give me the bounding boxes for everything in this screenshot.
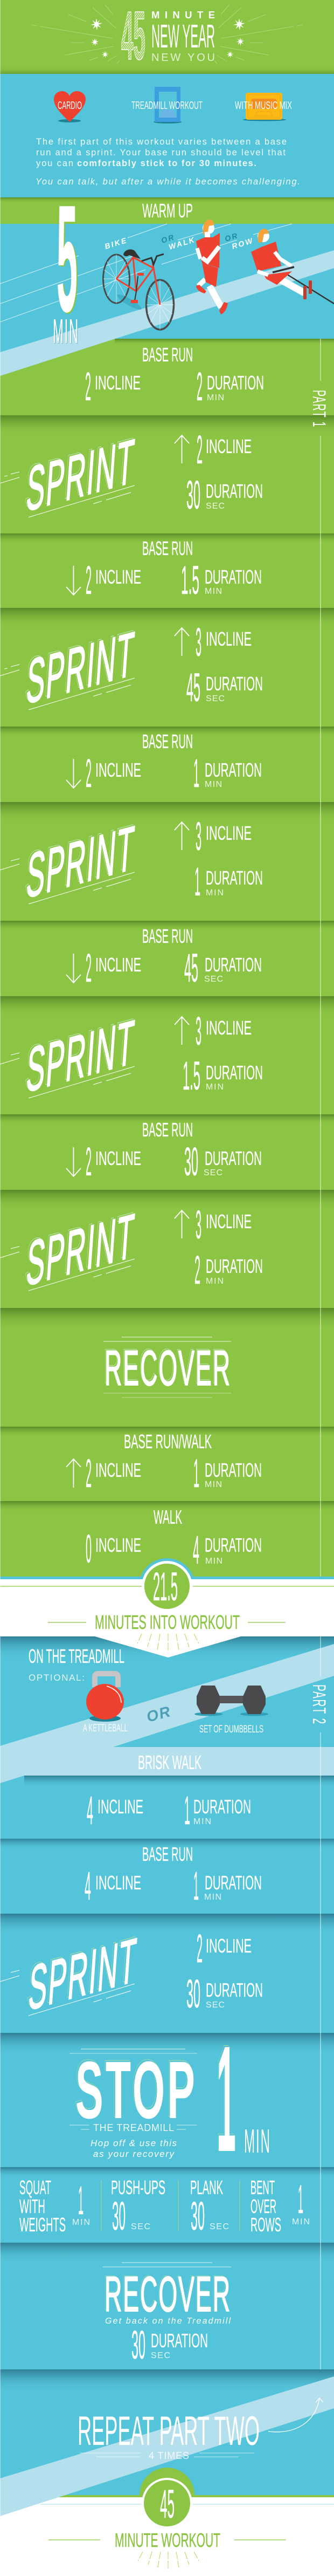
duration: 2 bbox=[197, 364, 203, 409]
icon: sparkle stars bbox=[91, 18, 245, 58]
label: bike: BIKE bbox=[103, 236, 128, 251]
exercise: push-ups: PUSH-UPS bbox=[111, 2176, 165, 2198]
icon: heart cardio: CARDIO bbox=[58, 99, 82, 112]
panel: warm up bbox=[0, 173, 334, 376]
duration: SEC bbox=[204, 1168, 222, 1177]
subheading: the treadmill bbox=[69, 2122, 197, 2133]
timeline: part 1 label and rule: PART 1 bbox=[309, 390, 329, 428]
incline: 0 bbox=[86, 1526, 92, 1571]
incline: INCLINE bbox=[95, 759, 141, 781]
light band bbox=[0, 250, 334, 376]
duration: DURATION bbox=[205, 954, 262, 976]
big number 1 min: 1 bbox=[215, 2013, 235, 2182]
incline: INCLINE bbox=[95, 1872, 141, 1894]
heading: sprint bbox=[0, 811, 137, 912]
panel: blue part two background bbox=[0, 1636, 334, 2495]
incline: 2 bbox=[86, 751, 92, 796]
panel: sprint 1 bbox=[0, 415, 334, 525]
incline bbox=[196, 1009, 252, 1053]
duration: 1 bbox=[193, 751, 199, 796]
decorative rays bbox=[137, 1634, 199, 1650]
top rules bbox=[81, 2049, 185, 2050]
intro paragraph: The first part of this workout varies between a base bbox=[36, 137, 287, 147]
incline bbox=[86, 751, 141, 796]
heading: sprint bbox=[0, 1199, 137, 1300]
circle badge 21.5 bbox=[144, 1564, 190, 1609]
incline bbox=[86, 1526, 141, 1571]
incline bbox=[197, 1926, 252, 1971]
label: set of dumbbells: SET OF DUMBBELLS bbox=[199, 1724, 263, 1735]
duration: MIN bbox=[205, 780, 222, 789]
panel: optional equipment bbox=[29, 1645, 268, 1735]
duration bbox=[186, 665, 263, 710]
title words NEW YOU: NEW YOU bbox=[151, 52, 215, 64]
exercise: bent over rows: 1 bbox=[298, 2177, 303, 2222]
figure: runner bbox=[196, 220, 228, 314]
panel: sprint 2: SPRINT bbox=[24, 619, 137, 718]
incline: INCLINE bbox=[206, 822, 252, 844]
intro paragraph: You can talk, but after a while it becomes challenging. bbox=[36, 177, 300, 187]
arrow: repeat bbox=[268, 2398, 323, 2432]
track road bbox=[0, 224, 334, 376]
incline: 4 bbox=[87, 1788, 93, 1833]
arrow down bbox=[66, 954, 81, 983]
incline: INCLINE bbox=[206, 1210, 252, 1232]
diagonal band bbox=[0, 2376, 334, 2516]
panel: warm up: 5 bbox=[58, 174, 79, 345]
duration: 30 bbox=[131, 2322, 145, 2367]
note: hop off bbox=[91, 2138, 177, 2159]
big number 1 min: 1 bbox=[217, 2015, 236, 2183]
panel: sprint 3 bbox=[0, 802, 334, 912]
arrow down bbox=[66, 759, 81, 788]
incline: INCLINE bbox=[95, 1534, 141, 1556]
panel: base run walk bbox=[0, 1427, 334, 1496]
incline bbox=[196, 620, 252, 664]
decorative rays bbox=[138, 2552, 199, 2568]
recover top rules bbox=[103, 1337, 231, 1341]
duration bbox=[193, 751, 262, 796]
intro paragraph bbox=[36, 137, 300, 187]
icon: dumbbell bbox=[194, 1686, 268, 1716]
panel: base run 3 bbox=[0, 727, 334, 796]
duration: DURATION bbox=[206, 1979, 263, 2001]
heading: sprint bbox=[0, 1005, 137, 1106]
exercise: squat with weights: WEIGHTS bbox=[19, 2214, 66, 2236]
incline: INCLINE bbox=[95, 1459, 141, 1481]
duration bbox=[184, 1139, 262, 1184]
heading: stop: STOP bbox=[75, 2044, 197, 2135]
exercise: bent over rows: OVER bbox=[250, 2195, 276, 2217]
heading: stop bbox=[74, 2043, 197, 2135]
icon: heart cardio bbox=[54, 91, 86, 122]
duration bbox=[186, 472, 263, 517]
heading: recover bbox=[103, 2266, 231, 2322]
duration: DURATION bbox=[205, 1147, 262, 1169]
panel: base run 2 bbox=[0, 533, 334, 602]
duration: MIN bbox=[207, 393, 224, 402]
panel: sprint 1: SPRINT bbox=[23, 424, 136, 524]
duration bbox=[183, 1053, 263, 1098]
duration: DURATION bbox=[205, 566, 262, 588]
exercise: squat with weights: WITH bbox=[19, 2195, 45, 2217]
panel: warm up: MIN bbox=[53, 312, 80, 351]
circle badge 45 bbox=[144, 2480, 190, 2526]
duration bbox=[194, 859, 263, 904]
exercise: squat with weights: MIN bbox=[72, 2218, 90, 2227]
top rules bbox=[103, 2263, 231, 2267]
heading: BRISK WALK bbox=[138, 1751, 201, 1773]
incline: 2 bbox=[86, 1139, 92, 1184]
label: row: ROW bbox=[231, 236, 255, 251]
incline: 3 bbox=[196, 1009, 201, 1053]
incline: 2 bbox=[86, 946, 92, 990]
incline: 2 bbox=[86, 1451, 92, 1496]
duration: 45 bbox=[184, 946, 198, 990]
heading: on the treadmill: ON THE TREADMILL bbox=[29, 1645, 124, 1667]
heading: BASE RUN bbox=[142, 925, 193, 947]
incline: INCLINE bbox=[95, 1147, 141, 1169]
intro paragraph: you can bbox=[36, 159, 73, 168]
duration: MIN bbox=[193, 1817, 211, 1826]
second rule bbox=[69, 2053, 197, 2054]
label: optional: OPTIONAL: bbox=[29, 1673, 85, 1683]
duration: 30 bbox=[186, 1971, 200, 2016]
duration bbox=[193, 1864, 262, 1908]
incline bbox=[86, 1139, 141, 1184]
arrow down bbox=[66, 1147, 81, 1176]
panel: 21.5 minutes divider: 21.5 bbox=[153, 1564, 178, 1609]
icon: bicycle bbox=[103, 249, 173, 330]
panel: stop the treadmill: MIN bbox=[244, 2123, 271, 2160]
incline: 2 bbox=[197, 427, 203, 472]
exercise: push-ups bbox=[111, 2176, 165, 2238]
duration: 1.5 bbox=[183, 1053, 200, 1098]
duration: 1 bbox=[184, 1788, 190, 1833]
panel: title header: NEW YEAR bbox=[151, 18, 215, 54]
note: get back on: Get back on the Treadmill bbox=[105, 2317, 231, 2326]
duration: MIN bbox=[206, 1277, 224, 1286]
figure: rower bbox=[251, 229, 334, 304]
white footer ground bbox=[0, 2497, 334, 2576]
incline: 2 bbox=[197, 1926, 203, 1971]
exercise: plank bbox=[190, 2176, 229, 2238]
arrow down bbox=[66, 566, 81, 595]
arrow up bbox=[175, 822, 189, 850]
panel: sprint part two: SPRINT bbox=[25, 1923, 138, 2023]
duration: DURATION bbox=[205, 1534, 262, 1556]
incline: 2 bbox=[86, 558, 92, 602]
label: or: OR bbox=[224, 231, 240, 243]
note: hop off: as your recovery bbox=[93, 2149, 175, 2159]
heading: BASE RUN bbox=[142, 344, 193, 366]
duration bbox=[197, 364, 264, 409]
intro paragraph: comfortably stick to for 30 minutes. bbox=[77, 159, 256, 168]
heading: recover bbox=[103, 1339, 231, 1396]
heading: BASE RUN/WALK bbox=[124, 1430, 212, 1453]
heading: BASE RUN bbox=[142, 537, 193, 559]
incline: 3 bbox=[196, 620, 201, 664]
arrow up bbox=[175, 435, 189, 463]
heading: BASE RUN bbox=[142, 730, 193, 752]
duration: DURATION bbox=[151, 2330, 208, 2352]
duration: MIN bbox=[204, 1893, 221, 1902]
exercise: push-ups: SEC bbox=[131, 2222, 150, 2231]
duration: 1 bbox=[194, 859, 200, 904]
duration: 30 bbox=[184, 1139, 198, 1184]
panel: sprint 4: SPRINT bbox=[23, 1005, 136, 1105]
incline bbox=[196, 814, 252, 859]
duration: SEC bbox=[206, 502, 225, 511]
incline: INCLINE bbox=[206, 1017, 252, 1039]
exercise: push-ups: 30 bbox=[112, 2194, 126, 2238]
panel: walk bbox=[0, 1501, 334, 1572]
duration: 1.5 bbox=[181, 558, 199, 602]
heading: sprint bbox=[0, 617, 137, 718]
light band bbox=[0, 2495, 334, 2497]
panel: warm up: MIN bbox=[53, 312, 79, 351]
panel: 21.5 minutes divider bbox=[0, 1558, 334, 1657]
duration: SEC bbox=[206, 2000, 225, 2010]
exercise: plank: PLANK bbox=[190, 2176, 223, 2198]
heading: sprint bbox=[0, 1923, 140, 2024]
duration: SEC bbox=[206, 694, 225, 703]
icon: kettleball bbox=[86, 1674, 124, 1722]
subheading: 4 times: 4 TIMES bbox=[149, 2450, 189, 2461]
duration: 2 bbox=[194, 1248, 200, 1292]
incline bbox=[196, 1202, 252, 1247]
panel: title header bbox=[0, 0, 334, 74]
recover bottom rules bbox=[103, 1393, 231, 1397]
duration bbox=[193, 1527, 262, 1572]
incline: 3 bbox=[196, 1202, 201, 1247]
panel: strength exercises bbox=[0, 2167, 334, 2238]
duration: DURATION bbox=[206, 1255, 263, 1277]
subheading: 4 times bbox=[80, 2450, 254, 2461]
duration: DURATION bbox=[205, 759, 262, 781]
panel: sprint 3: SPRINT bbox=[24, 813, 137, 912]
panel: sprint part two bbox=[0, 1914, 334, 2024]
duration: DURATION bbox=[206, 867, 263, 889]
panel: stop the treadmill bbox=[0, 2013, 334, 2183]
duration: MIN bbox=[205, 587, 222, 596]
label: a kettleball: A KETTLEBALL bbox=[83, 1723, 128, 1734]
incline: INCLINE bbox=[95, 954, 141, 976]
duration: DURATION bbox=[206, 1061, 263, 1084]
heading: WALK bbox=[154, 1506, 182, 1528]
exercise: plank: SEC bbox=[210, 2222, 229, 2231]
panel: base run 1 bbox=[85, 339, 334, 409]
panel: brisk walk bbox=[0, 1747, 334, 1833]
incline: INCLINE bbox=[95, 372, 141, 394]
intro paragraph: run and a sprint. Your base run should be level that bbox=[36, 148, 286, 157]
panel: sprint 1: SPRINT bbox=[24, 426, 137, 525]
exercise: bent over rows: ROWS bbox=[250, 2214, 281, 2236]
duration bbox=[194, 1248, 263, 1292]
duration: DURATION bbox=[205, 1459, 262, 1481]
exercise: squat with weights: 1 bbox=[78, 2178, 84, 2223]
duration: SEC bbox=[151, 2351, 170, 2360]
exercise: squat with weights bbox=[19, 2176, 90, 2236]
duration: SEC bbox=[204, 975, 223, 984]
incline: INCLINE bbox=[95, 566, 141, 588]
big number 1 min bbox=[215, 2013, 271, 2183]
incline: 3 bbox=[196, 814, 201, 859]
duration: 45 bbox=[186, 665, 200, 710]
exercise: bent over rows: BENT bbox=[250, 2176, 275, 2198]
duration bbox=[193, 1451, 262, 1496]
arrow up bbox=[175, 628, 189, 656]
panel: base run part two bbox=[0, 1839, 334, 1908]
duration: DURATION bbox=[206, 480, 263, 502]
duration: 1 bbox=[193, 1451, 199, 1496]
duration: DURATION bbox=[193, 1796, 251, 1818]
duration: MIN bbox=[206, 1083, 224, 1092]
label: or: OR bbox=[145, 1703, 172, 1725]
incline: INCLINE bbox=[206, 628, 252, 650]
incline: INCLINE bbox=[206, 1935, 252, 1957]
icon: cassette tape bbox=[235, 93, 292, 121]
panel: sprint 5: SPRINT bbox=[24, 1201, 137, 1300]
duration: MIN bbox=[206, 888, 224, 898]
big number 5 min bbox=[53, 173, 80, 351]
lane lines bbox=[0, 224, 292, 322]
panel: sprint 3: SPRINT bbox=[23, 811, 136, 910]
label: walk: WALK bbox=[168, 235, 197, 251]
incline: 4 bbox=[85, 1864, 91, 1908]
exercise: squat with weights: SQUAT bbox=[19, 2176, 51, 2198]
icon: treadmill: TREADMILL WORKOUT bbox=[131, 99, 203, 112]
icon: cassette tape: WITH MUSIC MIX bbox=[235, 99, 292, 112]
duration: DURATION bbox=[207, 372, 264, 394]
incline: INCLINE bbox=[98, 1796, 143, 1818]
heading: BASE RUN bbox=[142, 1119, 193, 1141]
duration: DURATION bbox=[205, 1872, 262, 1894]
panel: recover bbox=[0, 1308, 334, 1397]
arrow up bbox=[175, 1210, 189, 1238]
circle badge 45: 45 bbox=[160, 2482, 175, 2526]
panel: base run 5 bbox=[0, 1114, 334, 1184]
duration bbox=[131, 2322, 208, 2367]
caption: minute workout: MINUTE WORKOUT bbox=[115, 2529, 220, 2551]
incline bbox=[86, 558, 141, 602]
incline bbox=[85, 1864, 141, 1908]
arrow up bbox=[175, 1017, 189, 1045]
duration: DURATION bbox=[206, 673, 263, 695]
exercise: plank: 30 bbox=[191, 2194, 205, 2238]
panel: base run 4 bbox=[0, 921, 334, 990]
panel: warm up: 5 bbox=[57, 173, 78, 344]
duration: 1 bbox=[193, 1864, 199, 1908]
panel: 45 minute workout footer bbox=[40, 2468, 334, 2568]
duration bbox=[184, 1788, 251, 1833]
label: or: OR bbox=[160, 232, 176, 245]
duration: 4 bbox=[193, 1527, 199, 1572]
panel: page background green bbox=[0, 0, 334, 1579]
duration bbox=[186, 1971, 263, 2016]
panel: sprint 4: SPRINT bbox=[24, 1007, 137, 1106]
subheading: the treadmill: THE TREADMILL bbox=[93, 2122, 174, 2133]
duration bbox=[184, 946, 262, 990]
duration bbox=[181, 558, 262, 602]
heading: sprint bbox=[0, 424, 137, 525]
panel: sprint part two: SPRINT bbox=[26, 1925, 140, 2024]
duration: 30 bbox=[186, 472, 200, 517]
incline bbox=[197, 427, 252, 472]
duration: MIN bbox=[205, 1557, 222, 1566]
exercise: bent over rows bbox=[250, 2176, 310, 2236]
title rays bbox=[31, 5, 303, 64]
panel: sprint 5: SPRINT bbox=[23, 1199, 136, 1298]
heading: stop: STOP bbox=[74, 2043, 196, 2134]
heading: BASE RUN bbox=[142, 1843, 193, 1865]
title word MINUTE: MINUTE bbox=[151, 9, 215, 20]
incline: INCLINE bbox=[206, 435, 252, 457]
heading: warm up: WARM UP bbox=[142, 200, 193, 222]
incline bbox=[86, 1451, 141, 1496]
incline bbox=[85, 364, 141, 409]
panel: sprint 2: SPRINT bbox=[23, 617, 136, 716]
panel: repeat part two bbox=[0, 2369, 334, 2576]
panel: sprint 4 bbox=[0, 996, 334, 1106]
icon: treadmill bbox=[131, 87, 203, 124]
duration: MIN bbox=[205, 1480, 222, 1489]
panel: sprint 5 bbox=[0, 1190, 334, 1300]
incline bbox=[87, 1788, 143, 1833]
panel: sprint 2 bbox=[0, 608, 334, 718]
incline: 2 bbox=[85, 364, 91, 409]
incline bbox=[86, 946, 141, 990]
arrow up bbox=[66, 1459, 81, 1488]
timeline: part 2 label and rule: PART 2 bbox=[309, 1684, 329, 1725]
panel: intro blue bbox=[0, 74, 334, 197]
exercise: bent over rows: MIN bbox=[292, 2217, 310, 2226]
panel: recover part two bbox=[0, 2243, 334, 2367]
note: hop off: Hop off & use this bbox=[91, 2138, 177, 2148]
